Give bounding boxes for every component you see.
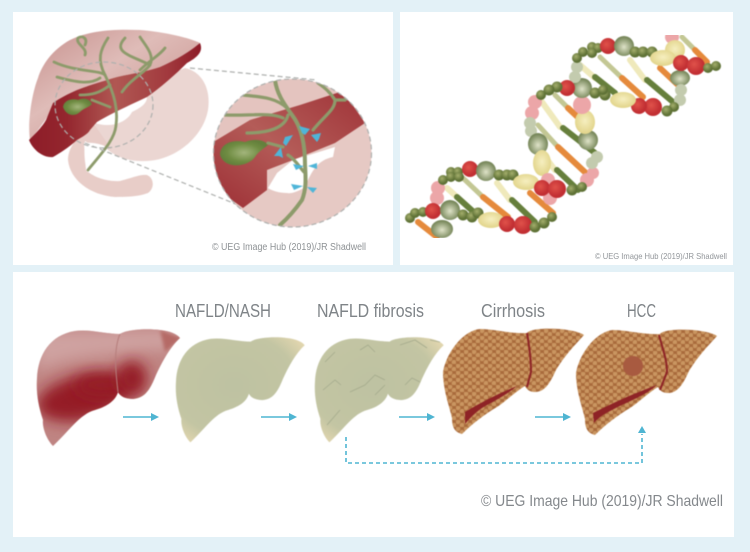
DNA helix illustration (405, 30, 721, 238)
bile ducts (54, 37, 165, 170)
panel: liver disease progression (13, 272, 734, 537)
fibrotic liver: NAFLD fibrosis (315, 337, 444, 442)
white gap by duodenum (84, 141, 104, 172)
arrow 4 (535, 413, 571, 421)
fatty liver: NAFLD/NASH (176, 337, 305, 442)
fibrosis strands (323, 340, 440, 425)
stage labels: HCC (627, 301, 656, 321)
panel: DNA of fruit and vegetables (400, 12, 733, 265)
stage labels: NAFLD/NASH (175, 301, 271, 321)
arrow 2 (261, 413, 297, 421)
enlarged gallbladder (220, 140, 268, 165)
rungs (418, 37, 707, 237)
healthy liver (32, 329, 182, 446)
stomach (95, 68, 209, 161)
credit: © UEG Image Hub (2019)/JR Shadwell (212, 242, 366, 253)
dashed circle outline (214, 79, 372, 227)
dashed bypass arrow (346, 426, 646, 463)
illustration: liver, stomach and duodenum (29, 30, 317, 207)
cirrhotic liver (443, 329, 584, 434)
duodenum (68, 124, 153, 197)
cirrhotic liver with tumour: HCC (576, 330, 717, 435)
pale tissue (214, 106, 372, 228)
stage labels: NAFLD fibrosis (317, 301, 424, 321)
enlarged ducts (225, 80, 345, 225)
liver upper surface (29, 30, 200, 140)
scar bands (659, 335, 667, 390)
stage labels (175, 301, 656, 321)
scar bands (527, 333, 531, 387)
blue narrowing arrows (274, 126, 321, 193)
panel: biliary anatomy (13, 12, 393, 265)
arrow 1 (123, 413, 159, 421)
red liver band (205, 91, 365, 208)
gallbladder (63, 99, 92, 115)
front strand fruit (405, 36, 721, 234)
arrow 3 (399, 413, 435, 421)
magnified detail circle (205, 76, 375, 231)
tumour (623, 356, 643, 376)
dashed magnifier source circle (55, 62, 153, 148)
credit: © UEG Image Hub (2019)/JR Shadwell (595, 251, 727, 261)
upper pale liver (210, 76, 375, 143)
back strand fruit (430, 30, 690, 238)
white gap (268, 147, 335, 193)
white notch (92, 97, 147, 125)
liver front surface (29, 43, 201, 157)
stage labels: Cirrhosis (481, 301, 545, 321)
zoom lines (190, 68, 317, 80)
